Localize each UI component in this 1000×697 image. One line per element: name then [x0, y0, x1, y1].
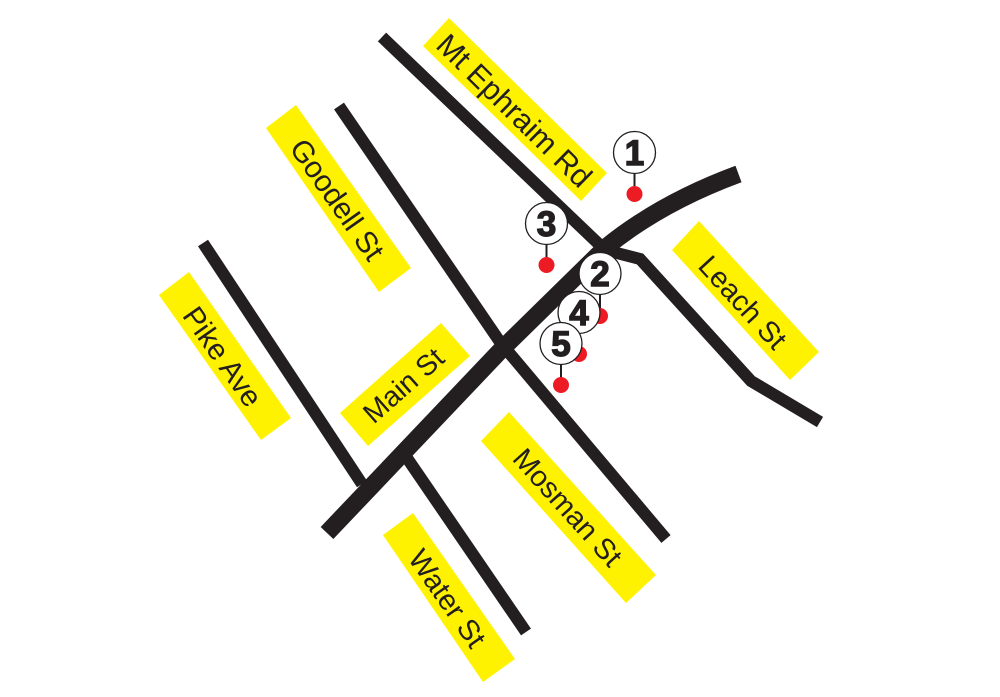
- road: Mt Ephraim Rd and Leach St: [382, 37, 820, 422]
- road: Goodell St and Mosman St: [339, 106, 666, 539]
- label: Water St: Water St: [401, 544, 492, 654]
- label: Goodell St: [266, 105, 411, 292]
- label: Mosman St: Mosman St: [506, 443, 628, 573]
- label: Pike Ave: Pike Ave: [176, 301, 268, 413]
- label: Leach St: Leach St: [692, 250, 792, 356]
- marker 1: [614, 132, 656, 202]
- label: Goodell St: Goodell St: [283, 133, 391, 267]
- label: Mt Ephraim Rd: Mt Ephraim Rd: [430, 28, 598, 194]
- marker 2: [579, 252, 621, 324]
- road: Pike Ave: [203, 243, 362, 484]
- marker 5: [540, 322, 582, 393]
- marker 3: 3: [537, 205, 556, 244]
- marker 4: [558, 292, 600, 362]
- road: Main St: [327, 174, 738, 533]
- marker 1: 1: [625, 134, 644, 173]
- marker 3: [526, 202, 568, 273]
- marker 4: 4: [569, 294, 589, 333]
- label: Mosman St: [481, 412, 656, 603]
- road: Water St: [407, 458, 526, 632]
- label: Main St: [340, 323, 470, 446]
- label: Main St: Main St: [357, 342, 451, 430]
- label: Leach St: [672, 221, 819, 380]
- marker 2: 2: [590, 255, 610, 294]
- label: Water St: [383, 513, 515, 682]
- label: Pike Ave: [159, 272, 291, 440]
- marker 5: 5: [551, 325, 571, 364]
